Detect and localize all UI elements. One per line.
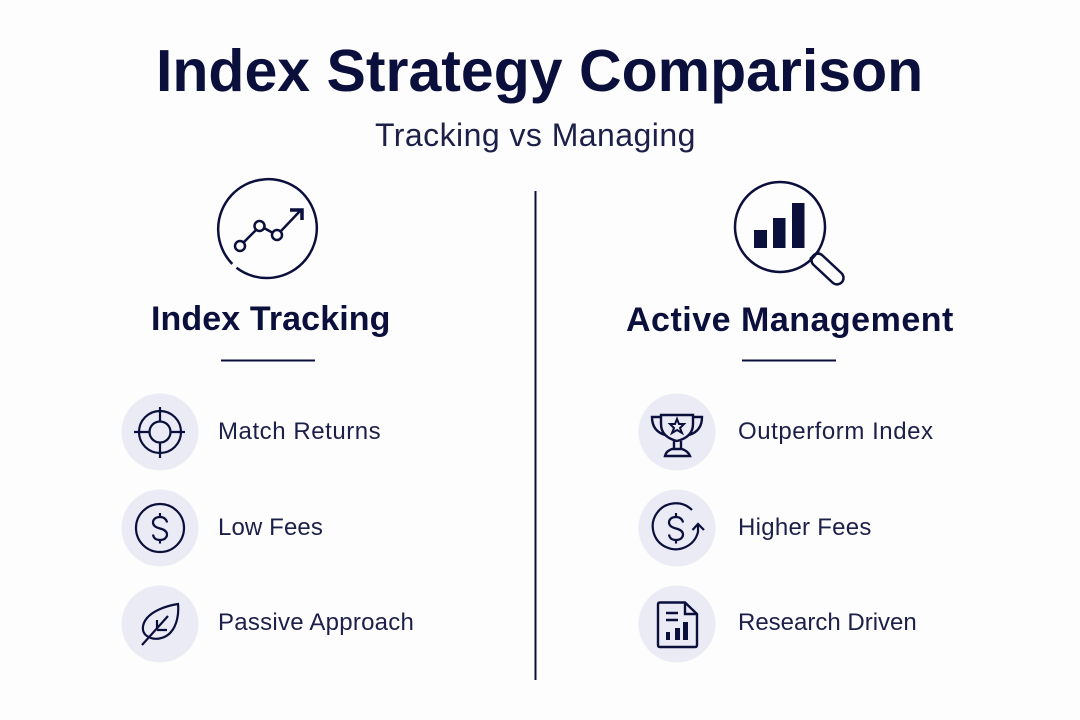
icon: magnifier with bars (735, 182, 846, 287)
icon: dollar coin (122, 490, 198, 566)
icon: line chart in circle (218, 179, 317, 278)
label: research driven: Research Driven (738, 609, 917, 636)
label: passive approach: Passive Approach (218, 609, 414, 636)
icon: trophy (638, 394, 716, 470)
underline left (221, 360, 315, 362)
icon: leaf (122, 586, 198, 662)
label: low fees: Low Fees (218, 514, 323, 541)
centre divider (534, 191, 536, 680)
icon: report document (638, 586, 716, 662)
underline right (742, 360, 836, 362)
title: Index Strategy Comparison (156, 38, 923, 104)
heading: index tracking: Index Tracking (151, 300, 390, 338)
label: higher fees: Higher Fees (738, 514, 872, 541)
label: outperform index: Outperform Index (738, 418, 934, 445)
label: match returns: Match Returns (218, 418, 381, 445)
heading: active management: Active Management (626, 301, 954, 339)
subtitle: Tracking vs Managing (375, 117, 696, 153)
icon: target (122, 394, 198, 470)
icon: dollar with arrow (638, 490, 716, 566)
